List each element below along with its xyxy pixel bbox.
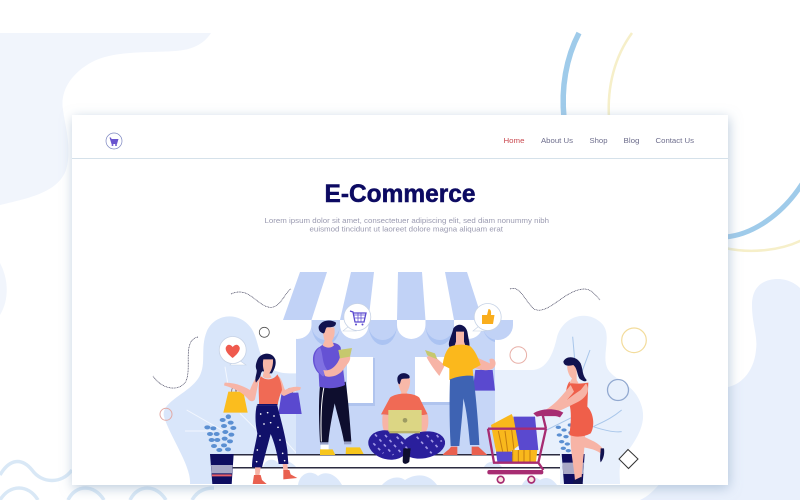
standing man <box>319 382 364 455</box>
illustration: right blob <box>493 316 643 484</box>
steps <box>232 454 560 485</box>
phone <box>425 350 437 359</box>
bubble: heart <box>219 336 246 365</box>
trousers <box>450 376 479 446</box>
decorative waves <box>0 462 214 500</box>
shop wall <box>296 325 495 460</box>
storefront <box>283 272 513 460</box>
header divider <box>72 158 728 159</box>
description: Lorem ipsum dolor sit amet, consectetuer adipiscing elit, sed diam nonummy nibh <box>264 216 549 225</box>
cart frame <box>488 415 560 470</box>
foot <box>403 448 411 464</box>
arms <box>427 353 445 376</box>
illustration: left blob <box>164 316 297 484</box>
decorative shapes <box>160 327 646 468</box>
pushing woman <box>545 357 604 484</box>
shoes <box>443 447 457 455</box>
bags in cart <box>491 414 524 453</box>
windows <box>347 357 373 405</box>
belt <box>257 404 277 406</box>
seated man <box>365 373 447 464</box>
front leg <box>571 435 585 481</box>
ankles <box>255 467 261 476</box>
bags <box>223 392 248 413</box>
face <box>263 359 273 379</box>
top <box>259 374 282 405</box>
laptop <box>388 410 422 432</box>
shopping cart <box>487 409 563 483</box>
forearms <box>382 415 389 431</box>
shirt <box>313 343 345 388</box>
head and hair <box>567 365 579 383</box>
woman with bags <box>223 354 302 484</box>
landing page card <box>72 115 728 485</box>
navigation: Home <box>504 136 524 145</box>
bubble: thumbs up <box>473 304 501 331</box>
pants <box>252 406 288 467</box>
title: E-Commerce <box>324 180 476 208</box>
dress <box>566 382 593 437</box>
plant right <box>556 423 573 452</box>
shopping bag <box>473 370 495 391</box>
description: euismod tincidunt ut laoreet dolore magna aliquam erat <box>310 224 504 234</box>
arms <box>545 385 574 414</box>
hair <box>449 325 469 347</box>
navigation: Blog <box>624 136 640 145</box>
arm <box>323 353 350 377</box>
trousers <box>319 382 351 442</box>
navigation <box>504 136 694 145</box>
shoes <box>253 475 267 484</box>
standing woman <box>425 325 496 455</box>
plant left <box>204 414 236 484</box>
decorative dotted curves <box>153 288 600 388</box>
hair <box>255 354 276 383</box>
arms <box>224 377 259 401</box>
awning <box>283 272 513 345</box>
logo icon: cart <box>106 133 122 149</box>
head <box>323 327 335 348</box>
navigation: Shop <box>590 136 608 145</box>
navigation: Contact Us <box>656 136 694 145</box>
notepad <box>338 348 352 358</box>
navigation: About Us <box>541 136 573 145</box>
shirt <box>381 394 428 428</box>
legs <box>365 426 411 464</box>
bubble: cart <box>343 304 371 331</box>
back leg <box>580 433 604 453</box>
decorative arcs <box>563 33 800 251</box>
neck and face <box>398 378 410 397</box>
standing man upper body <box>313 321 352 388</box>
description <box>264 216 549 234</box>
